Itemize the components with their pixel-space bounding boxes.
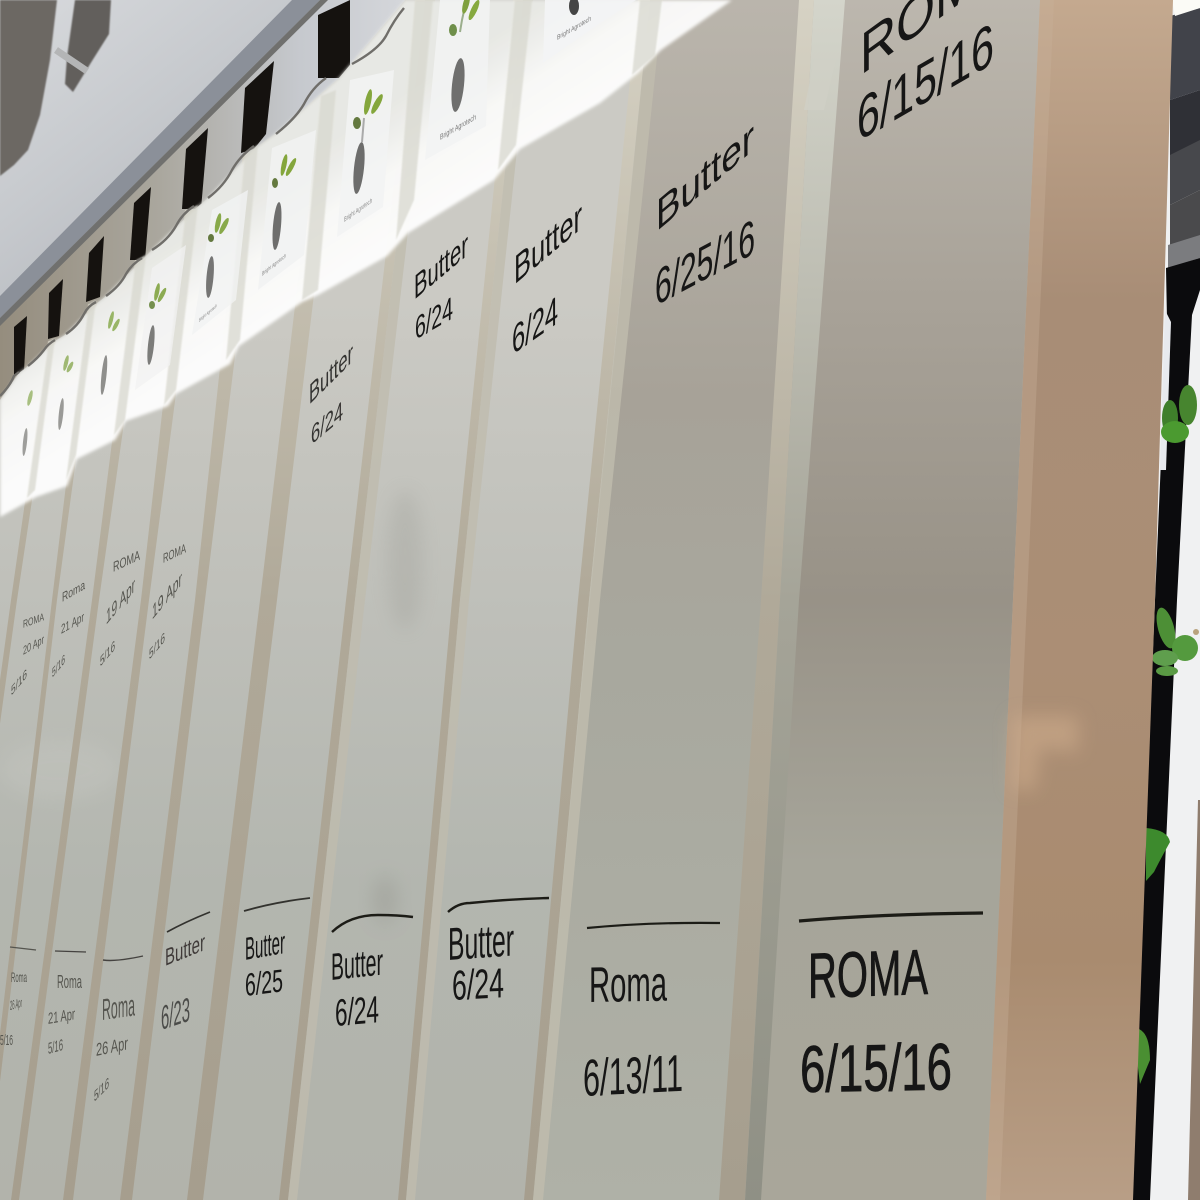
label: Butter B: Butter <box>331 942 383 989</box>
tower hook wires <box>0 8 404 396</box>
ceiling <box>0 0 420 330</box>
white lit upper band <box>0 0 732 517</box>
label: rule Butter D <box>167 912 210 932</box>
label: Butter third: Butter <box>414 225 468 308</box>
card: tower 7 <box>57 355 75 430</box>
label group: tower E: 5/16 <box>94 1073 109 1105</box>
icon: black slots between towers <box>14 0 350 375</box>
label: 6/24 A: 6/24 <box>452 959 504 1009</box>
label group: tower C: 21 Apr <box>61 609 84 637</box>
label group: tower F: 5/16 <box>48 1036 63 1058</box>
label: Butter fourth: Butter <box>309 337 353 412</box>
label: 6/25 C: 6/25 <box>245 962 283 1003</box>
label group: tower C: Roma <box>62 577 85 605</box>
label: 6/15/16 big: 6/15/16 <box>800 1029 952 1106</box>
label group: tower D <box>11 612 44 699</box>
label: Butter: Butter <box>656 110 754 241</box>
plants <box>1137 385 1199 1084</box>
panel: largest tower face <box>750 0 1040 1200</box>
label group: tower F <box>48 951 86 1058</box>
label: rule Roma <box>587 923 720 928</box>
card: tower 4: Bright Agrotech <box>199 303 217 324</box>
handwritten labels: far upper row <box>11 541 186 699</box>
label group: tower A: 5/16 <box>149 628 165 663</box>
icon: plant bottom <box>1137 1029 1150 1084</box>
upper ridge lines on lit band <box>27 0 662 498</box>
panel: beige tower side <box>986 0 1173 1200</box>
label: rule Butter B <box>332 915 413 932</box>
label: rule Butter C <box>244 898 310 911</box>
card: tower 4 <box>192 190 248 335</box>
card: tower 2 <box>337 70 394 237</box>
label group: tower F: 21 Apr <box>48 1005 75 1028</box>
card: tower 6 <box>99 311 121 395</box>
label group: tower C: 5/16 <box>52 651 65 681</box>
label: ROMA big: ROMA <box>808 936 928 1012</box>
panel: right tower faces <box>533 0 830 1200</box>
label group: tower F: Roma <box>57 972 83 992</box>
label group: tower G: 5/16 <box>0 1032 13 1049</box>
label group: tower A <box>149 541 186 663</box>
card: tower 0 <box>543 0 636 63</box>
label group: tower E: Roma <box>102 989 135 1027</box>
icon: plant middle <box>1152 606 1199 676</box>
label group: tower E: 26 Apr <box>96 1033 128 1060</box>
icon: dark hanging shape left <box>0 0 57 176</box>
handwritten labels: lower row: 6/23 <box>161 990 190 1038</box>
label: 6/13/11: 6/13/11 <box>583 1045 683 1108</box>
label: 6/25/16: 6/25/16 <box>655 209 755 317</box>
card: tower 8 <box>22 390 34 456</box>
label: 6/24 B: 6/24 <box>335 989 379 1035</box>
panel: logo cards on towers <box>22 0 636 456</box>
icon: reflection on beige side <box>1012 716 1078 790</box>
label group: tower D: 5/16 <box>11 665 27 699</box>
tower ridges <box>0 0 845 1200</box>
card: tower 1: Bright Agrotech <box>440 112 476 142</box>
beam and connector band above towers <box>0 0 430 410</box>
card: tower 2: Bright Agrotech <box>344 196 372 224</box>
card: tower 1 <box>425 0 490 160</box>
label group: tower A: ROMA <box>163 541 186 566</box>
handwritten labels: lower row <box>161 898 983 1108</box>
label group: tower B: 5/16 <box>100 636 115 670</box>
label group: tower D: ROMA <box>23 612 44 631</box>
label: Butter A: Butter <box>448 913 514 970</box>
label: rule big Roma <box>799 913 983 921</box>
card: tower 3: Bright Agrotech <box>262 253 286 278</box>
card: tower 5 <box>135 245 186 390</box>
label group: tower G <box>0 947 36 1049</box>
label group: tower B: ROMA <box>113 548 140 576</box>
label group: tower A: 19 Apr <box>152 566 182 625</box>
label group: tower D: 20 Apr <box>23 632 44 658</box>
label: Butter second: Butter <box>514 192 582 294</box>
label group: tower G: Roma <box>11 969 27 985</box>
label group: tower G: 26 Apr <box>10 995 22 1013</box>
handwritten labels: far lower row <box>0 947 143 1105</box>
label: rule Butter A <box>448 898 549 912</box>
card: tower 0: Bright Agrotech <box>557 14 591 42</box>
icon: plant upper <box>1161 385 1197 443</box>
icon: plant lower <box>1146 828 1170 881</box>
label: Roma: Roma <box>589 956 667 1013</box>
label: 6/24 fourth: 6/24 <box>311 396 343 451</box>
label: 6/24 second: 6/24 <box>512 288 558 364</box>
icon: dark hanging shape right <box>65 0 111 92</box>
label group: tower B: 19 Apr <box>106 572 135 630</box>
label group: tower C <box>52 577 85 681</box>
label: 6/24 third: 6/24 <box>415 290 453 347</box>
handwritten labels: upper row <box>309 0 1010 451</box>
handwritten labels: lower row: Butter <box>245 924 285 967</box>
label group: tower E <box>94 956 143 1105</box>
card: tower 3 <box>258 130 316 290</box>
label: Butter D: Butter <box>165 929 205 972</box>
right background: dark machinery, black post and white tower <box>1130 0 1200 1200</box>
icon: smudge on tower <box>373 876 397 924</box>
label group: tower B <box>100 548 140 670</box>
icon: ceiling peg <box>56 50 87 71</box>
